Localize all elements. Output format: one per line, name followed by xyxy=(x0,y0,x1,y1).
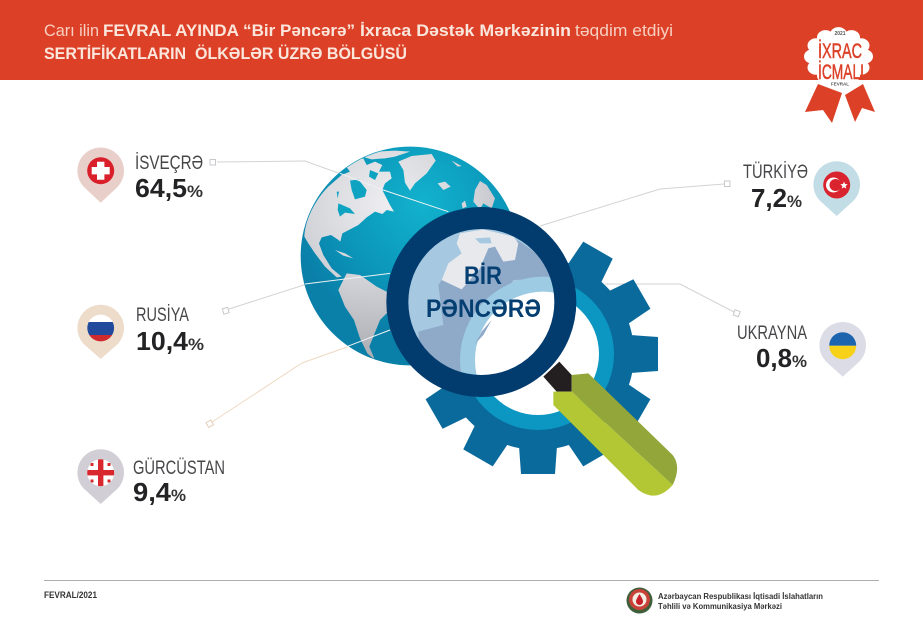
handle xyxy=(572,373,677,485)
item: Türkiyə: TÜRKİYƏ xyxy=(743,160,808,183)
item: Türkiyə: % xyxy=(787,192,802,211)
pin: Turkey entry xyxy=(813,161,860,216)
item: Gürcüstan: GÜRCÜSTAN xyxy=(133,457,225,479)
header band xyxy=(0,0,923,80)
item: Gürcüstan: % xyxy=(171,486,186,505)
title xyxy=(44,22,673,63)
item: Türkiyə: 7,2 xyxy=(751,185,787,213)
item: İsveçrə xyxy=(77,147,203,203)
pin: Russia entry xyxy=(77,305,124,359)
lens text xyxy=(426,262,541,323)
item: Rusiya: RUSİYA xyxy=(136,303,189,326)
footer organisation text: Təhlili və Kommunikasiya Mərkəzi xyxy=(658,602,782,611)
badge: İxrac İcmalı: FEVRAL xyxy=(831,82,849,86)
lens text: BİR xyxy=(464,262,502,290)
lens text: PƏNCƏRƏ xyxy=(426,295,541,323)
title: İxraca Dəstək Mərkəzinin xyxy=(360,22,571,40)
badge: İxrac İcmalı: 2021 xyxy=(834,31,846,37)
item: Türkiyə xyxy=(743,160,860,216)
item: Ukrayna: % xyxy=(792,352,807,371)
item: Ukrayna: UKRAYNA xyxy=(737,322,807,344)
footer organisation text xyxy=(658,592,823,611)
neck xyxy=(543,362,572,392)
connector lines xyxy=(206,160,740,427)
magnifier xyxy=(397,218,677,496)
title: SERTİFİKATLARIN ÖLKƏLƏR ÜZRƏ BÖLGÜSÜ xyxy=(44,44,407,63)
footer date: FEVRAL/2021 xyxy=(44,590,97,600)
title: FEVRAL AYINDA “Bir Pəncərə” xyxy=(103,22,355,40)
gear xyxy=(425,241,658,474)
white line sections on globe xyxy=(305,173,448,347)
icon: emblem of Azerbaijan xyxy=(626,588,652,614)
item: Rusiya: % xyxy=(188,335,204,354)
lens contents xyxy=(408,229,554,375)
title: Carı ilin xyxy=(44,22,99,40)
footer organisation text: Azərbaycan Respublikası İqtisadi İslahatların xyxy=(658,592,823,601)
item: İsveçrə: % xyxy=(187,182,203,201)
item: Ukrayna: 0,8 xyxy=(756,345,792,373)
globe xyxy=(301,147,519,365)
pin: Georgia entry xyxy=(77,449,124,504)
title: təqdim etdiyi xyxy=(575,22,673,40)
item: Ukrayna xyxy=(737,322,866,377)
continents north of the equator xyxy=(304,151,495,277)
badge: İxrac İcmalı: İCMALI xyxy=(818,61,864,84)
hudson bay and lakes xyxy=(337,170,378,217)
pin: Ukraine entry xyxy=(819,322,866,377)
lens ring xyxy=(397,218,565,386)
item: Gürcüstan: 9,4 xyxy=(133,479,172,507)
badge: İxrac İcmalı xyxy=(804,27,875,123)
item: İsveçrə: 64,5 xyxy=(135,175,187,203)
item: İsveçrə: İSVEÇRƏ xyxy=(135,151,203,174)
main illustration: globe, gear, magnifier xyxy=(301,147,677,496)
item: Rusiya: 10,4 xyxy=(136,328,189,356)
item: Rusiya xyxy=(77,303,204,359)
pin: Sweden entry xyxy=(77,147,124,203)
badge: İxrac İcmalı: İXRAC xyxy=(818,40,862,63)
item: Gürcüstan xyxy=(77,449,225,507)
